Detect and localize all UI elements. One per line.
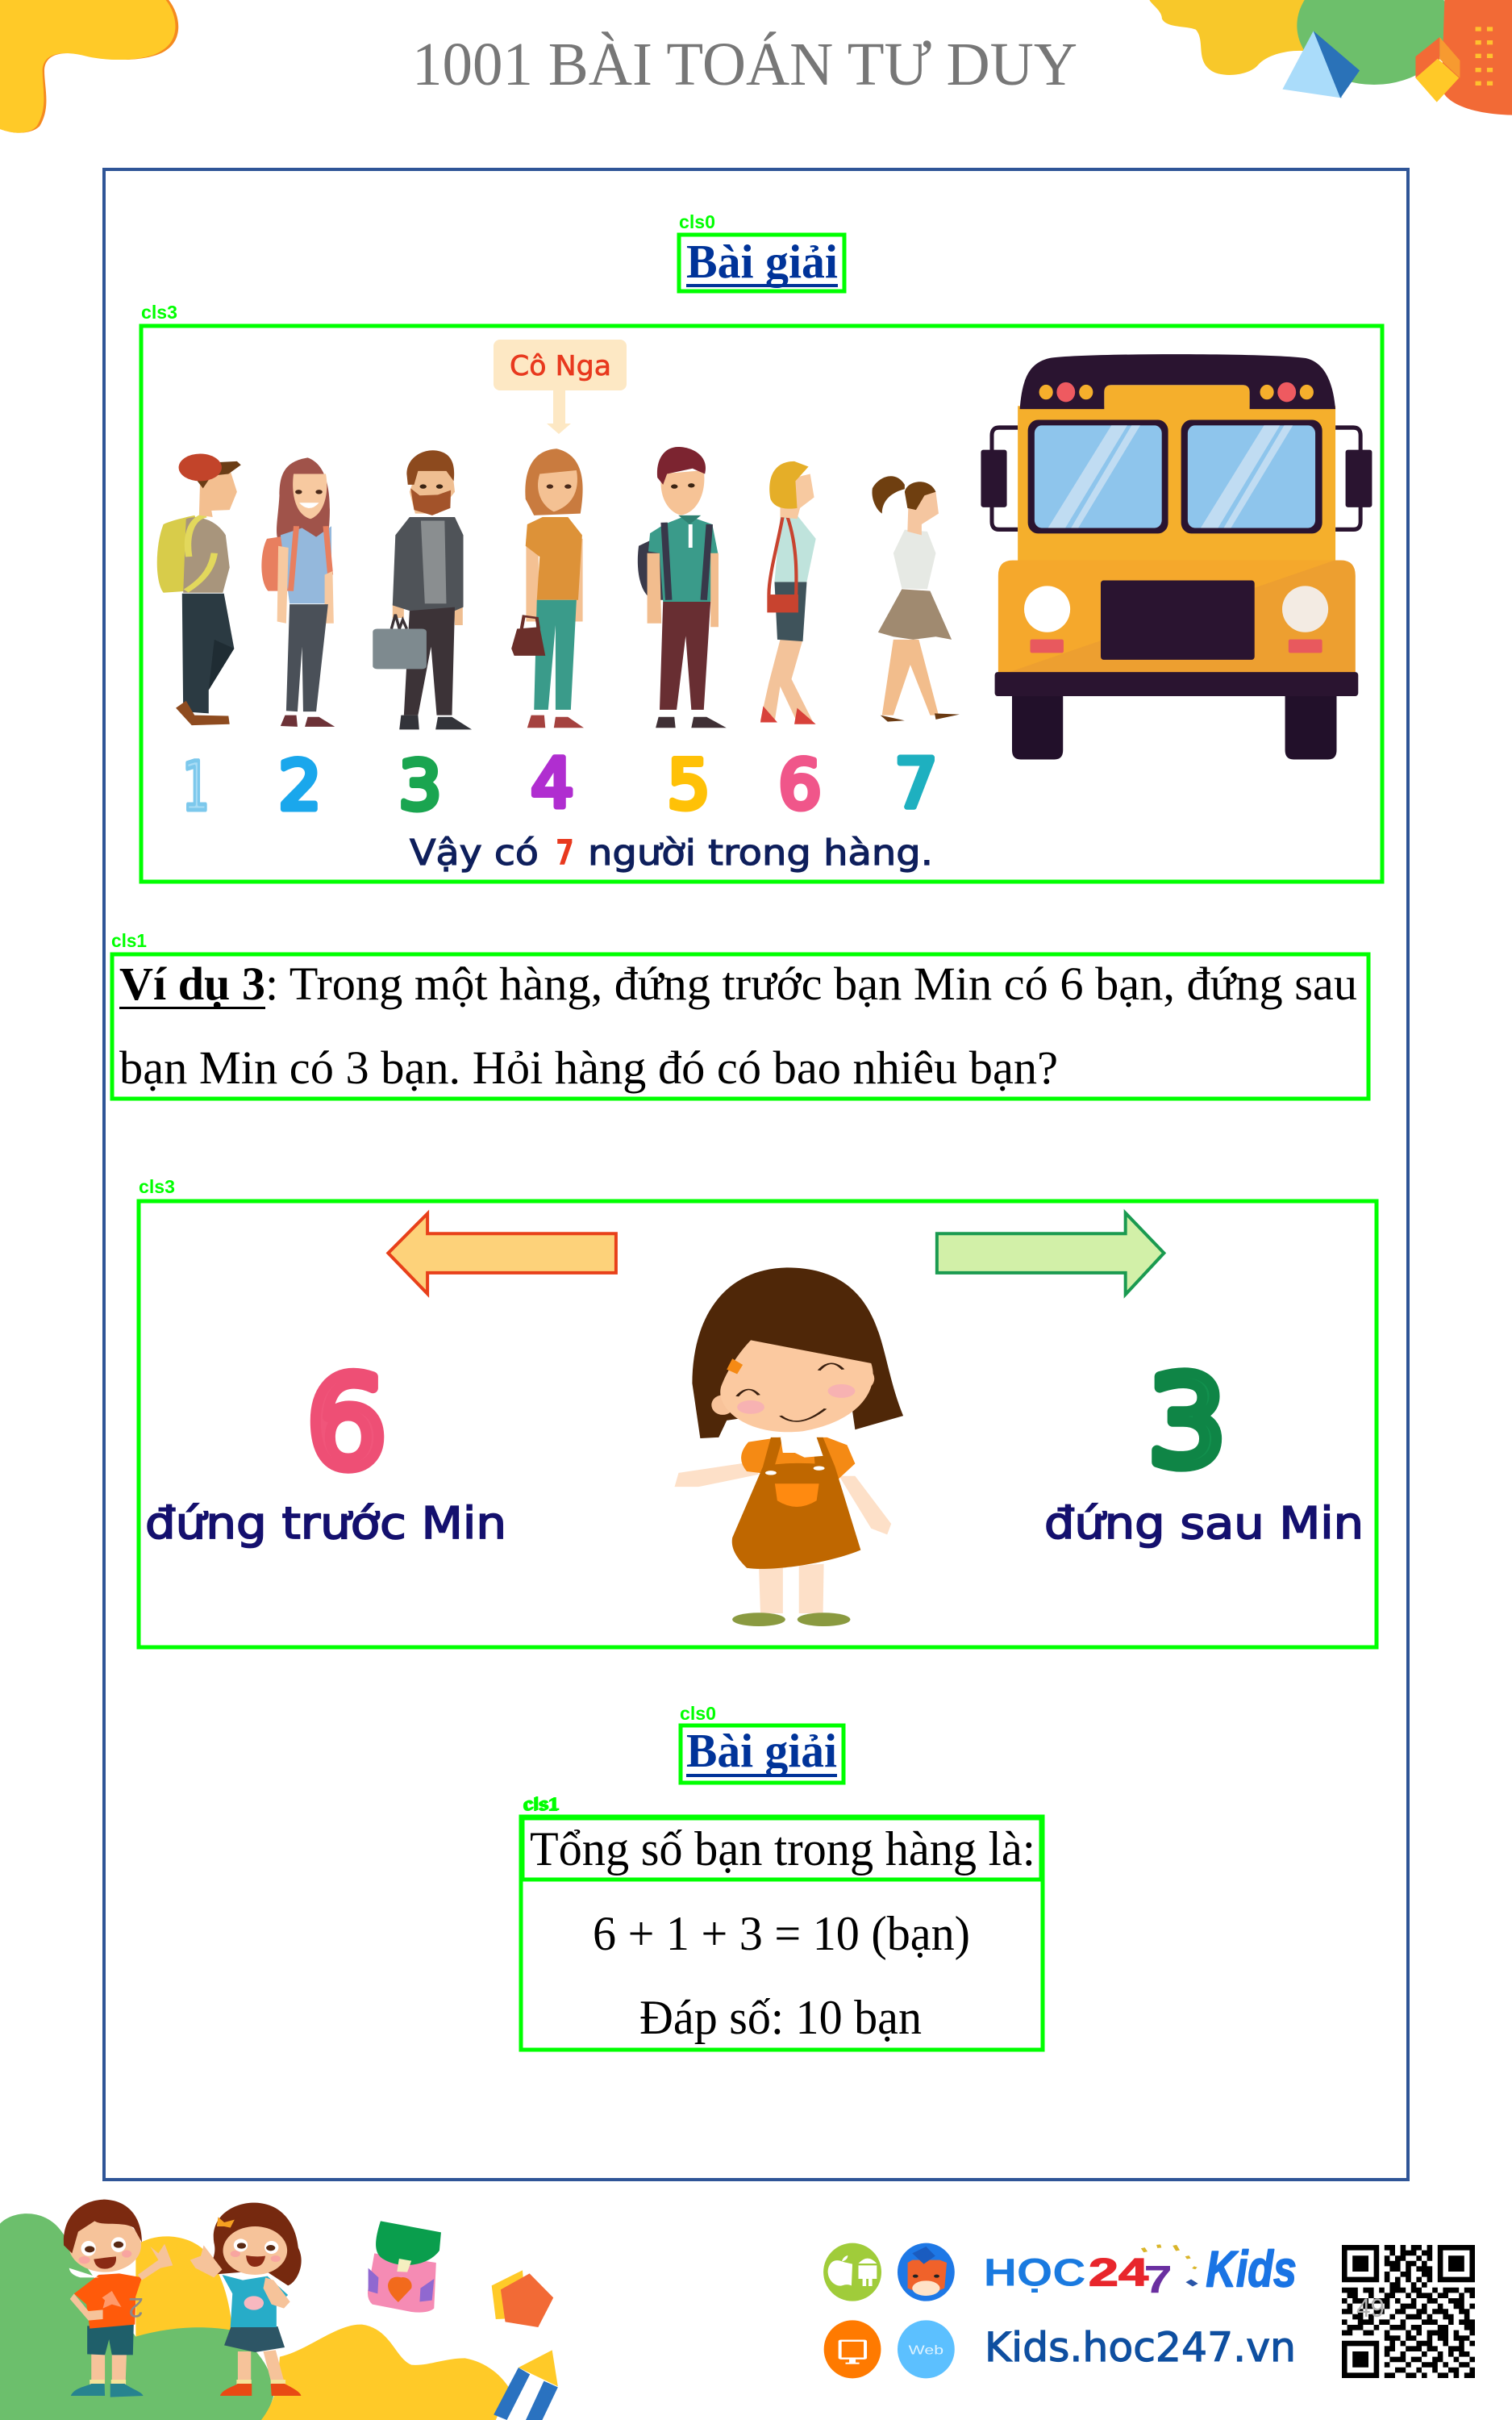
heading: Bài giải (second): Bài giải [686, 1724, 837, 1777]
icon: school bus [981, 354, 1372, 759]
text block: Ví dụ 3 problem: Ví dụ 3 [119, 958, 265, 1010]
QR code [1342, 2245, 1475, 2378]
text block: Ví dụ 3 problem: cls1 [111, 930, 147, 951]
numbers 1 to 7: 3 [398, 746, 442, 825]
shape: pentagon [492, 2270, 553, 2327]
text: Kids [1206, 2241, 1297, 2297]
backpack [368, 2221, 441, 2313]
text block: Ví dụ 3 problem: : Trong một hàng, đứng trước bạn Min có 6 bạn, đứng sau [265, 958, 1357, 1010]
decoration: top-right shapes [1149, 0, 1512, 115]
text block: solution: Đáp số: 10 bạn [639, 1991, 922, 2044]
text block: solution: cls1 [524, 1793, 560, 1814]
number 6: 6 [306, 1350, 387, 1496]
heading: Bài giải (second) [680, 1703, 843, 1783]
caption: Vậy có 7 người trong hàng: 7 [556, 832, 574, 874]
numbers 1 to 7: 1 [182, 747, 210, 826]
text block: solution: Tổng số bạn trong hàng là: [530, 1822, 1035, 1876]
text block: solution [521, 1793, 1043, 2050]
text block: Ví dụ 3 problem [111, 930, 1368, 1099]
pencil [494, 2350, 558, 2420]
panel: 6 before Min, 3 after Min [139, 1176, 1377, 1647]
panel: line of people and bus: cls3 [141, 302, 177, 323]
footer icons and logos [823, 2241, 1297, 2378]
numbers 1 to 7: 2 [278, 746, 322, 825]
icon: web [898, 2320, 955, 2378]
numbers 1 to 7: 4 [531, 744, 574, 823]
numbers 1 to 7: 5 [667, 745, 710, 824]
boy [64, 2200, 173, 2397]
main content frame [104, 169, 1408, 2180]
footer illustration: hills, kids and school items [0, 2200, 558, 2420]
people in line [157, 447, 960, 729]
arrow: right [937, 1213, 1164, 1295]
label: đứng sau Min: đứng sau Min [1044, 1498, 1364, 1549]
numbers 1 to 7: 7 [894, 744, 938, 823]
heading: Bài giải (first): Bài giải [686, 235, 838, 288]
label: đứng trước Min: đứng trước Min [145, 1498, 506, 1549]
caption: Vậy có 7 người trong hàng [410, 832, 933, 874]
page mark near boy: 2 [128, 2292, 144, 2322]
logo: HOC247 Kids: 24 [1089, 2251, 1148, 2294]
girl [190, 2203, 302, 2396]
icon: web: Web [909, 2343, 943, 2357]
page number: 49 [1356, 2293, 1385, 2322]
callout: Cô Nga: Cô Nga [510, 350, 611, 382]
person 5 [638, 447, 727, 728]
logo: HOC247 Kids: HỌC [984, 2251, 1085, 2294]
arrow: left [388, 1213, 616, 1294]
panel: 6 before Min, 3 after Min: cls3 [139, 1176, 175, 1197]
icon: apple and android [823, 2243, 881, 2301]
illustration: girl Min [675, 1267, 903, 1626]
hills [0, 2213, 523, 2420]
numbers 1 to 7: 6 [778, 745, 822, 824]
text block: Ví dụ 3 problem: bạn Min có 3 bạn. Hỏi hàng đó có bao nhiêu bạn? [119, 1041, 1058, 1094]
callout: Cô Nga [494, 340, 627, 434]
person 7 [872, 476, 960, 722]
icon: fox mascot [898, 2243, 955, 2301]
person 4 [511, 449, 584, 728]
person 1 [157, 453, 241, 725]
number 3: 3 [1148, 1350, 1227, 1495]
text block: solution: 6 + 1 + 3 = 10 (bạn) [593, 1907, 970, 1960]
website: Kids.hoc247.vn: Kids.hoc247.vn [985, 2324, 1296, 2371]
caption: Vậy có 7 người trong hàng: Vậy có [410, 832, 539, 874]
heading: Bài giải (first) [679, 211, 844, 291]
heading: Bài giải (first): cls0 [679, 211, 715, 232]
title: 1001 BÀI TOÁN TƯ DUY [412, 31, 1077, 98]
heading: Bài giải (second): cls0 [680, 1703, 716, 1724]
icon: desktop [824, 2320, 881, 2378]
logo: HOC247 Kids [984, 2241, 1297, 2301]
person 3 [373, 450, 472, 729]
decoration: top-left yellow paint drip [0, 0, 178, 133]
text block: solution: cls1 [523, 1794, 558, 1815]
logo: HOC247 Kids: 7 [1143, 2259, 1173, 2301]
caption: Vậy có 7 người trong hàng: người trong hàng. [588, 832, 933, 874]
numbers 1 to 7 [182, 744, 938, 826]
panel: line of people and bus [141, 302, 1382, 882]
person 6 [760, 461, 816, 724]
person 2 [261, 457, 335, 727]
